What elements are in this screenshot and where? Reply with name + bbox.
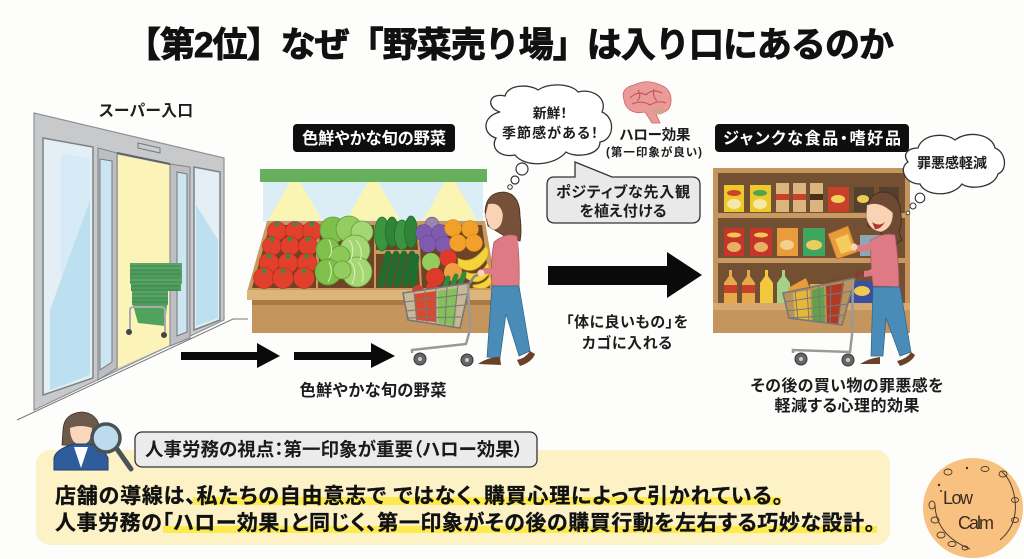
heading tag: junk food: ジャンクな食品・嗜好品 xyxy=(723,129,901,148)
arrow: entrance to stall 2 xyxy=(294,343,395,368)
bottles xyxy=(724,270,874,303)
highlight: line one xyxy=(193,497,781,505)
logo: Low Calm: Calm xyxy=(958,513,994,533)
entrance label: スーパー入口 xyxy=(99,102,193,120)
body text line one: 店舗の導線は、私たちの自由意志で ではなく、購買心理によって引かれている。 xyxy=(55,485,783,508)
panel: HR perspective xyxy=(36,450,890,545)
cabbages xyxy=(315,216,373,287)
snack bags, top row xyxy=(724,183,899,212)
callout: positive preconception: を植え付ける xyxy=(580,202,666,220)
label: HR perspective heading xyxy=(135,432,537,467)
heading tag: vegetables xyxy=(293,124,455,152)
thought bubble: fresh and seasonal: 季節感がある！ xyxy=(502,125,598,141)
label: HR perspective heading: 人事労務の視点：第一印象が重要（ハロー効果） xyxy=(145,439,523,460)
thought bubble: guilt reduction xyxy=(903,134,1004,215)
icon: shopping baskets xyxy=(126,263,182,338)
illustration: snack shelf xyxy=(713,168,910,333)
snack bags, middle row xyxy=(724,228,896,256)
caption: put healthy things in basket: カゴに入れる xyxy=(582,334,672,352)
heading tag: vegetables: 色鮮やかな旬の野菜 xyxy=(302,129,446,148)
caption: guilt reduction effect: 軽減する心理的効果 xyxy=(774,397,920,415)
caption: put healthy things in basket: 「体に良いもの」を xyxy=(566,313,688,331)
body text line two: 人事労務の「ハロー効果」と同じく、第一印象がその後の購買行動を左右する巧妙な設計。 xyxy=(55,511,875,535)
caption: guilt reduction effect xyxy=(750,376,944,415)
halo effect label: (第一印象が良い) xyxy=(606,145,702,159)
thought bubble: guilt reduction: 罪悪感軽減 xyxy=(917,155,987,171)
heading tag: junk food xyxy=(715,124,909,152)
halo effect label xyxy=(606,127,702,159)
illustration: woman shopper with vegetables xyxy=(478,192,535,366)
halo effect label: ハロー効果 xyxy=(619,127,691,144)
callout: positive preconception: ポジティブな先入観 xyxy=(556,183,690,201)
fruit xyxy=(422,246,492,289)
caption: put healthy things in basket xyxy=(566,313,688,352)
highlight: line two xyxy=(163,526,877,533)
leafy greens xyxy=(374,216,418,251)
arrow: big arrow to junk food xyxy=(548,252,702,298)
tomatoes xyxy=(254,222,322,288)
icon: HR person with magnifying glass xyxy=(54,412,131,470)
caption: vegetables: 色鮮やかな旬の野菜 xyxy=(300,381,446,400)
eggplants and oranges xyxy=(416,217,452,254)
callout: positive preconception xyxy=(547,162,700,223)
logo: Low Calm xyxy=(923,458,1023,558)
title: 【第2位】なぜ「野菜売り場」は入り口にあるのか xyxy=(126,26,894,65)
thought bubble: fresh and seasonal: 新鮮！ xyxy=(533,105,567,121)
cucumbers xyxy=(381,254,416,284)
arrow: entrance to stall 1 xyxy=(181,343,280,368)
logo: Low Calm: Low xyxy=(943,488,974,508)
illustration: shopping cart with snacks xyxy=(783,272,864,366)
illustration: smiling woman holding a snack xyxy=(828,192,915,366)
illustration: supermarket entrance door xyxy=(17,113,248,420)
illustration: shopping cart with vegetables xyxy=(403,274,482,366)
caption: guilt reduction effect: その後の買い物の罪悪感を xyxy=(750,376,944,395)
icon: brain xyxy=(623,82,671,123)
illustration: vegetable stall xyxy=(247,169,497,333)
thought bubble: fresh and seasonal xyxy=(486,85,612,189)
